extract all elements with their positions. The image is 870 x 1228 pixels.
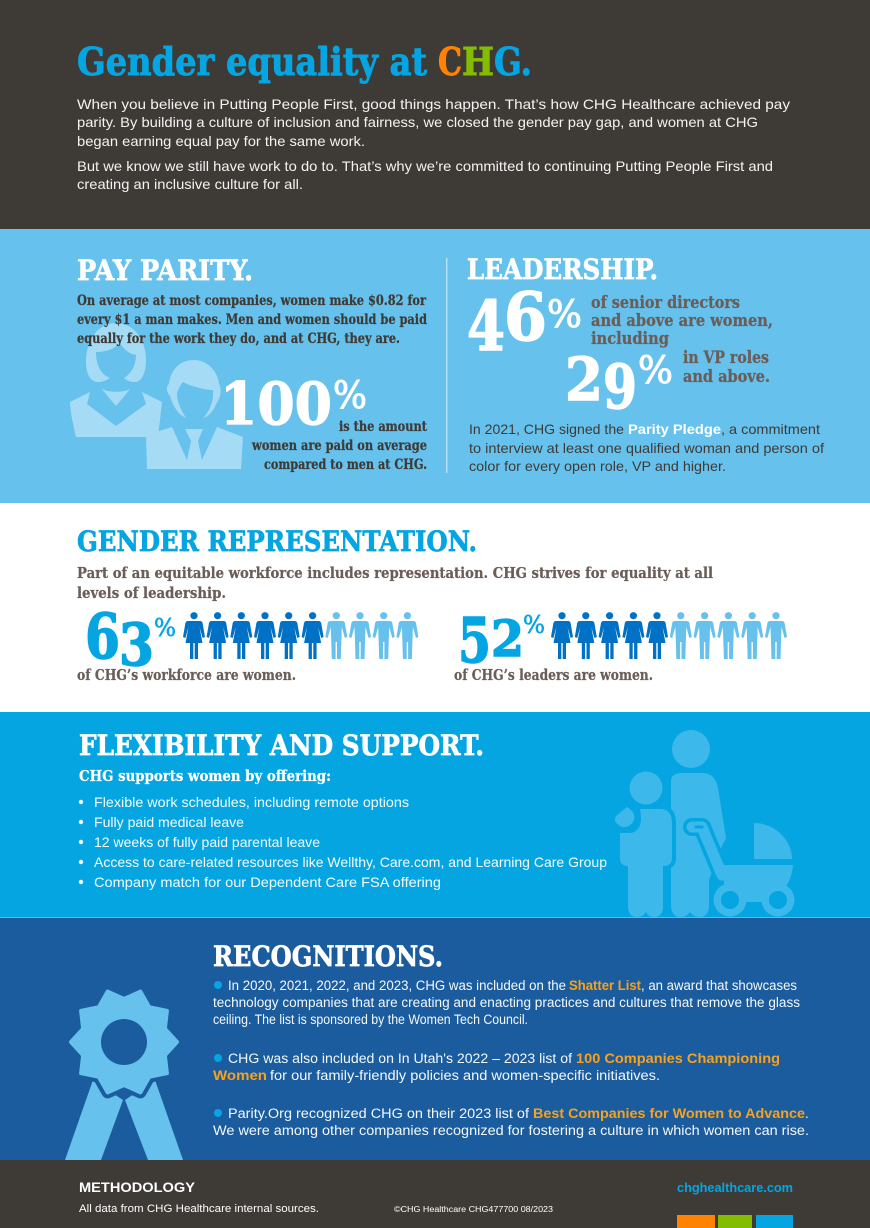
recognition: shatter list: In 2020, 2021, 2022, and 2023, CHG was included on the (228, 978, 566, 993)
methodology heading: METHODOLOGY (79, 1180, 195, 1195)
recognition: 100 companies: CHG was also included on In Utah's 2022 – 2023 list of (228, 1051, 572, 1066)
recognition: 100 companies (213, 1051, 780, 1083)
recognition: shatter list: technology companies that are creating and enacting practices and cultures that remove the glass (213, 995, 800, 1010)
stat: 46%: 6 (504, 278, 547, 356)
panel: header (0, 0, 870, 229)
heading: leadership: LEADERSHIP. (467, 253, 658, 286)
panel: gender representation (0, 503, 870, 712)
stat caption: 100% (251, 419, 428, 473)
stat caption: leaders: of CHG’s leaders are women. (454, 667, 653, 684)
recognition: shatter list (213, 978, 800, 1027)
stat: 52% (458, 604, 545, 677)
stat caption: 46%: including (591, 329, 669, 349)
icon: man silhouette (146, 360, 243, 469)
stat: 29% (565, 345, 673, 423)
pay parity text: every $1 a man makes. Men and women should be paid (77, 312, 427, 328)
recognition: 100 companies: Women (213, 1068, 267, 1083)
heading: pay parity: PAY PARITY. (77, 254, 253, 287)
recognition: best companies: Parity.Org recognized CHG on their 2023 list of (228, 1106, 529, 1121)
intro text: parity. By building a culture of inclusion and fairness, we closed the gender pay gap, and women at CHG (77, 114, 758, 130)
stat: 29%: % (638, 349, 673, 392)
intro text (77, 96, 790, 192)
icon: family with stroller (615, 730, 794, 917)
parity pledge text: , a commitment (721, 421, 820, 437)
stat caption: 29% (683, 348, 770, 387)
parity pledge text: Parity Pledge (628, 421, 721, 437)
subheading: supports: CHG supports women by offering: (79, 768, 331, 785)
intro text: When you believe in Putting People First, good things happen. That’s how CHG Healthcare achieved pay (77, 96, 790, 112)
stat: 63%: 3 (119, 611, 154, 679)
stat caption: workforce: of CHG’s workforce are women. (77, 667, 296, 684)
stat: 52%: 2 (491, 609, 524, 668)
intro text: began earning equal pay for the same work. (77, 133, 365, 149)
stat caption: 100%: women are paid on average (251, 438, 427, 454)
recognition: best companies: Best Companies for Women to Advance (533, 1106, 806, 1121)
logo blocks (677, 1215, 793, 1228)
benefits list: Flexible work schedules, including remote options (94, 794, 409, 810)
stat: 63% (85, 600, 176, 679)
stat: 52%: % (523, 611, 545, 639)
panel: flexibility and support (0, 712, 870, 917)
recognition: best companies (213, 1106, 809, 1138)
stat caption: 46%: of senior directors (591, 293, 740, 313)
stat: 52%: 5 (458, 604, 491, 677)
stat: 63%: 6 (85, 600, 120, 673)
pay parity text: equally for the work they do, and at CHG, they are. (77, 331, 400, 347)
stat: 29%: 2 (565, 345, 603, 414)
stat: 29%: 9 (603, 352, 637, 423)
pay parity text (77, 293, 427, 347)
stat caption: 29%: in VP roles (683, 348, 769, 368)
recognition: best companies: . (805, 1106, 809, 1121)
parity pledge text (469, 421, 824, 474)
stat caption: 100%: is the amount (339, 419, 428, 435)
panel: footer (0, 1160, 870, 1228)
parity pledge text: In 2021, CHG signed the (469, 421, 624, 437)
benefits list: Access to care-related resources like Wellthy, Care.com, and Learning Care Group (94, 854, 607, 870)
pictogram: workforce 6 of 10 (183, 612, 418, 659)
title: Gender equality at (77, 39, 427, 84)
recognition: best companies: We were among other companies recognized for fostering a culture in which women can rise. (213, 1123, 809, 1138)
title: C (438, 39, 462, 84)
stat caption: 100%: compared to men at CHG. (264, 457, 427, 473)
stat: 100%: 100 (220, 370, 332, 438)
stat caption: 29%: and above. (683, 367, 770, 387)
panel: recognitions (0, 917, 870, 1160)
icon: woman silhouette (70, 323, 162, 437)
stat: 100%: % (333, 374, 367, 417)
heading: flexibility and support: FLEXIBILITY AND SUPPORT. (79, 729, 484, 762)
benefits list (79, 794, 607, 890)
recognition: shatter list: Shatter List (569, 978, 641, 993)
benefits list: Company match for our Dependent Care FSA offering (94, 874, 441, 890)
stat caption: 46% (591, 293, 773, 349)
intro text: But we know we still have work to do to. That’s why we’re committed to continuing Putting People First and (77, 158, 773, 174)
recognition: shatter list: ceiling. The list is sponsored by the Women Tech Council. (213, 1012, 528, 1027)
representation text: Part of an equitable workforce includes representation. CHG strives for equality at all (77, 564, 713, 582)
benefits list: 12 weeks of fully paid parental leave (94, 834, 320, 850)
parity pledge text: color for every open role, VP and higher. (469, 458, 726, 474)
panel: pay parity and leadership (0, 229, 870, 503)
stat caption: 46%: and above are women, (591, 311, 773, 331)
recognition: 100 companies: 100 Companies Championing (576, 1051, 780, 1066)
copyright: ©CHG Healthcare CHG477700 08/2023 (394, 1205, 554, 1214)
stat: 63%: % (154, 614, 176, 642)
pictogram: leaders 5 of 10 (551, 612, 787, 659)
representation text: levels of leadership. (77, 584, 226, 602)
title: H (462, 39, 494, 84)
recognition: shatter list: , an award that showcases (641, 978, 797, 993)
parity pledge text: to interview at least one qualified woman and person of (469, 440, 824, 456)
representation text (77, 564, 713, 602)
intro text: creating an inclusive culture for all. (77, 176, 303, 192)
website: chghealthcare.com (677, 1181, 793, 1195)
icon: award ribbon (65, 992, 183, 1160)
recognition: 100 companies: for our family-friendly policies and women-specific initiatives. (270, 1068, 660, 1083)
pay parity text: On average at most companies, women make $0.82 for (77, 293, 427, 309)
stat: 46% (467, 278, 582, 367)
stat: 46%: % (547, 293, 582, 336)
benefits list: Fully paid medical leave (94, 814, 244, 830)
methodology text: All data from CHG Healthcare internal sources. (79, 1203, 319, 1215)
heading: gender representation: GENDER REPRESENTATION. (77, 525, 477, 558)
stat: 46%: 4 (467, 287, 505, 367)
heading: recognitions: RECOGNITIONS. (213, 940, 443, 973)
title: G. (494, 39, 532, 84)
